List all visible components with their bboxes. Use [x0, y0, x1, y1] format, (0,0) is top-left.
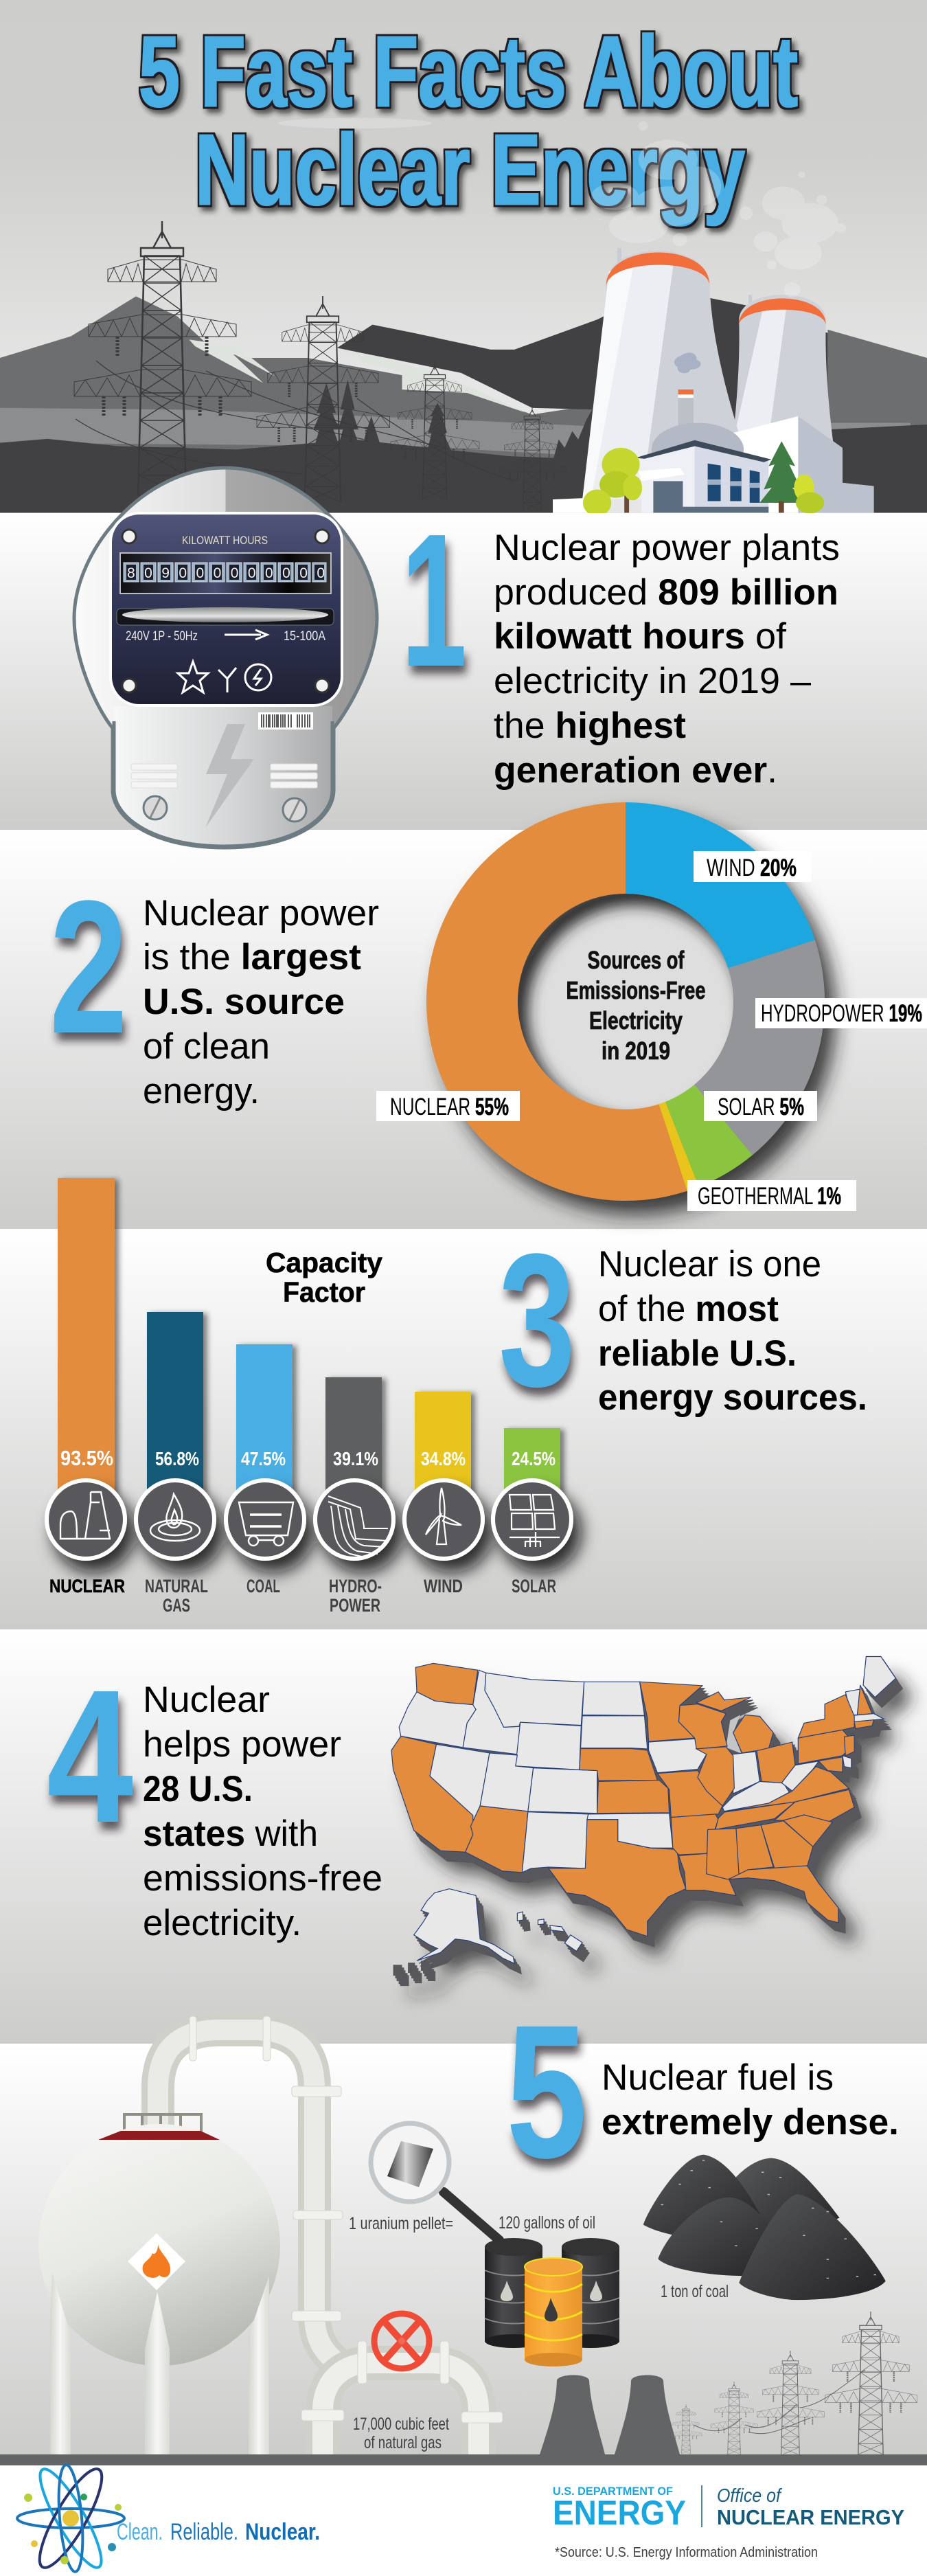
lake michigan — [726, 1715, 742, 1754]
icon badges — [47, 1480, 571, 1559]
source note: *Source: U.S. Energy Information Administration — [555, 2545, 818, 2560]
section background 4 — [0, 1629, 927, 2044]
slice: geothermal 1% — [659, 1102, 699, 1191]
arrow — [225, 630, 267, 640]
fact 4 text: emissions-free — [143, 1858, 382, 1899]
black barrel left — [485, 2238, 542, 2348]
icon: solar panels — [510, 1495, 560, 1547]
fact 1 text: Nuclear power plants — [494, 528, 840, 568]
donut chart: sources of emissions-free electricity — [376, 802, 927, 1211]
label: uranium pellet: 1 uranium pellet= — [349, 2214, 453, 2233]
label: natural gas — [353, 2415, 449, 2452]
icon: hydropower dam — [328, 1496, 388, 1558]
lightning bolt — [205, 724, 254, 828]
fact 1 text: kilowatt hours of — [494, 616, 786, 657]
donut center title: Sources of — [588, 946, 685, 974]
alaska — [414, 1889, 514, 1963]
donut slices — [426, 802, 825, 1201]
meter screen — [111, 513, 342, 705]
category labels: SOLAR — [512, 1576, 556, 1596]
icon: wind turbine — [426, 1488, 461, 1544]
fact 1 text: the highest — [494, 705, 686, 746]
title — [139, 15, 798, 227]
fact 1 text: electricity in 2019 – — [494, 661, 812, 701]
slice: wind 20% — [626, 802, 815, 969]
donut center title: in 2019 — [602, 1037, 670, 1065]
label: oil gallons: 120 gallons of oil — [499, 2213, 595, 2233]
DOE logo — [553, 2485, 904, 2532]
meter shell — [74, 468, 377, 848]
category labels: NUCLEAR — [49, 1576, 125, 1596]
hero panel — [0, 0, 927, 516]
fact 5 text: Nuclear fuel is — [602, 2057, 834, 2098]
meter screws — [122, 530, 329, 692]
illustration: oil barrels — [485, 2238, 619, 2366]
cooling tower front — [582, 248, 759, 499]
fact 3 text — [598, 1244, 867, 1418]
orange barrel — [525, 2258, 582, 2366]
magnifier lens — [371, 2123, 449, 2202]
DOE logo: ENERGY — [553, 2494, 686, 2532]
barcode — [258, 712, 313, 730]
bar values — [60, 1446, 556, 1470]
meter label: KILOWATT HOURS — [182, 534, 268, 547]
hero sky background — [0, 0, 927, 513]
title: Nuclear Energy — [195, 113, 745, 227]
illustration: coal piles — [643, 2155, 886, 2300]
bar values: 39.1% — [333, 1448, 378, 1469]
chart title — [266, 1247, 382, 1308]
fact 3 text: of the most — [598, 1289, 779, 1329]
cooling tower silhouettes — [540, 2375, 680, 2454]
uranium pellet — [387, 2141, 433, 2187]
number 4: 4 — [47, 1651, 134, 1862]
bars — [58, 1178, 560, 1508]
category labels: HYDRO- — [329, 1576, 382, 1596]
hawaii — [517, 1912, 582, 1952]
tank red cap — [98, 2131, 220, 2140]
section background 3 — [0, 1229, 927, 1629]
steam clouds — [278, 118, 846, 297]
label: wind: WIND 20% — [707, 855, 797, 881]
fact 3 text: reliable U.S. — [598, 1333, 797, 1374]
fact 3 text: Nuclear is one — [598, 1244, 821, 1285]
meter display: 809000000000 — [127, 565, 325, 581]
black barrel right — [562, 2238, 619, 2348]
fact 2 text: U.S. source — [143, 982, 345, 1022]
DOE logo: Office of — [717, 2485, 783, 2506]
donut center title: Electricity — [589, 1006, 683, 1035]
trees — [583, 441, 824, 516]
fact 4 text: electricity. — [143, 1903, 301, 1943]
slice: nuclear 55% — [426, 802, 687, 1201]
donut hole — [518, 894, 733, 1109]
number 1: 1 — [401, 495, 467, 706]
tagline: Nuclear. — [245, 2519, 320, 2545]
label: coal: 1 ton of coal — [661, 2282, 729, 2301]
DOE logo: NUCLEAR ENERGY — [717, 2505, 904, 2529]
section background 1 — [0, 513, 927, 830]
section background 5 — [0, 2044, 927, 2454]
pipe collars — [190, 2016, 503, 2423]
fact 5 text — [602, 2057, 899, 2143]
donut center title — [566, 946, 706, 1065]
callout: uranium pellet magnifier — [371, 2123, 499, 2240]
fact 2 text: Nuclear power — [143, 893, 379, 934]
fact 4 text — [143, 1680, 382, 1943]
illustration: natural gas pipes — [158, 2016, 503, 2454]
meter current: 15-100A — [284, 629, 325, 644]
tagline: Reliable. — [170, 2519, 238, 2545]
slice: hydropower 19% — [694, 940, 825, 1155]
meter lower body — [114, 706, 332, 846]
tank legs — [50, 2272, 269, 2454]
category labels: WIND — [424, 1576, 463, 1596]
fact 1 text — [494, 528, 840, 791]
fact 2 text: is the largest — [143, 937, 361, 978]
icon: coal cart — [239, 1502, 293, 1546]
containment dome and buildings — [553, 389, 874, 512]
map: U.S. states with nuclear power — [391, 1657, 895, 1976]
nuclear states — [391, 1663, 874, 1936]
cooling tower rear — [733, 295, 834, 446]
bar chart: capacity factor — [47, 1178, 571, 1616]
number 2: 2 — [49, 861, 128, 1073]
footer — [0, 2462, 927, 2576]
lower arch pipe — [323, 2363, 479, 2454]
aleutian islands — [393, 1961, 428, 1976]
fact 4 text: states with — [143, 1814, 318, 1854]
atom logo — [17, 2462, 124, 2575]
fact 5 text: extremely dense. — [602, 2102, 899, 2143]
mountains and landscape — [0, 293, 927, 512]
label: natural gas: of natural gas — [364, 2433, 442, 2452]
number 5: 5 — [506, 1986, 587, 2197]
meter ratings: 240V 1P - 50Hz — [126, 629, 198, 644]
icon: electricity meter — [74, 468, 377, 848]
nuclear plant — [553, 248, 874, 516]
meter dial slot — [117, 607, 334, 625]
pylon silhouettes — [670, 2312, 917, 2455]
fact 2 text: energy. — [143, 1071, 260, 1111]
fact 1 text: produced 809 billion — [494, 572, 838, 613]
icon: nuclear plant — [60, 1492, 110, 1539]
category labels: GAS — [163, 1595, 190, 1616]
fact 4 text: Nuclear — [143, 1680, 270, 1720]
icon: gas flame — [150, 1494, 200, 1541]
tagline — [117, 2519, 320, 2545]
transmission towers — [74, 221, 566, 510]
label: solar: SOLAR 5% — [718, 1094, 804, 1120]
donut center title: Emissions-Free — [566, 976, 706, 1004]
vents — [131, 764, 317, 788]
number 3: 3 — [499, 1214, 575, 1426]
bar values: 47.5% — [241, 1448, 286, 1469]
illustration: gas tank — [38, 2114, 280, 2454]
fact 3 text: energy sources. — [598, 1377, 867, 1418]
bar values: 34.8% — [421, 1448, 466, 1469]
valve wheel — [374, 2314, 429, 2369]
fact 1 text: generation ever. — [494, 750, 777, 791]
ground bar — [0, 2454, 927, 2465]
label: geothermal: GEOTHERMAL 1% — [698, 1183, 841, 1210]
chart title: Factor — [283, 1276, 365, 1308]
bar values: 24.5% — [512, 1448, 556, 1469]
fact 2 text: of clean — [143, 1026, 270, 1067]
category labels: POWER — [330, 1595, 380, 1616]
category labels: NATURAL — [145, 1576, 208, 1596]
label: natural gas: 17,000 cubic feet — [353, 2415, 449, 2434]
fact 4 text: helps power — [143, 1724, 341, 1765]
chart title: Capacity — [266, 1247, 382, 1278]
fact 4 text: 28 U.S. — [143, 1769, 253, 1809]
base screws — [144, 796, 306, 822]
tagline: Clean. — [117, 2519, 163, 2545]
fact 2 text — [143, 893, 379, 1111]
bar values: 56.8% — [155, 1448, 199, 1469]
meter certification icons — [178, 662, 271, 692]
label: nuclear: NUCLEAR 55% — [390, 1094, 509, 1120]
upper pipe — [158, 2030, 347, 2370]
tank sphere — [38, 2124, 280, 2366]
non-nuclear states — [399, 1657, 895, 1873]
magnifier handle — [444, 2192, 499, 2240]
hazard diamond — [128, 2233, 185, 2290]
DOE logo: U.S. DEPARTMENT OF — [553, 2485, 673, 2498]
bar values: 93.5% — [60, 1446, 113, 1470]
meter display — [120, 553, 331, 594]
category labels: COAL — [247, 1576, 280, 1596]
tank railing — [124, 2114, 201, 2132]
slice: solar 5% — [665, 1085, 753, 1187]
category labels — [49, 1576, 556, 1616]
section background 2 — [0, 830, 927, 1229]
footer background — [0, 2465, 927, 2576]
